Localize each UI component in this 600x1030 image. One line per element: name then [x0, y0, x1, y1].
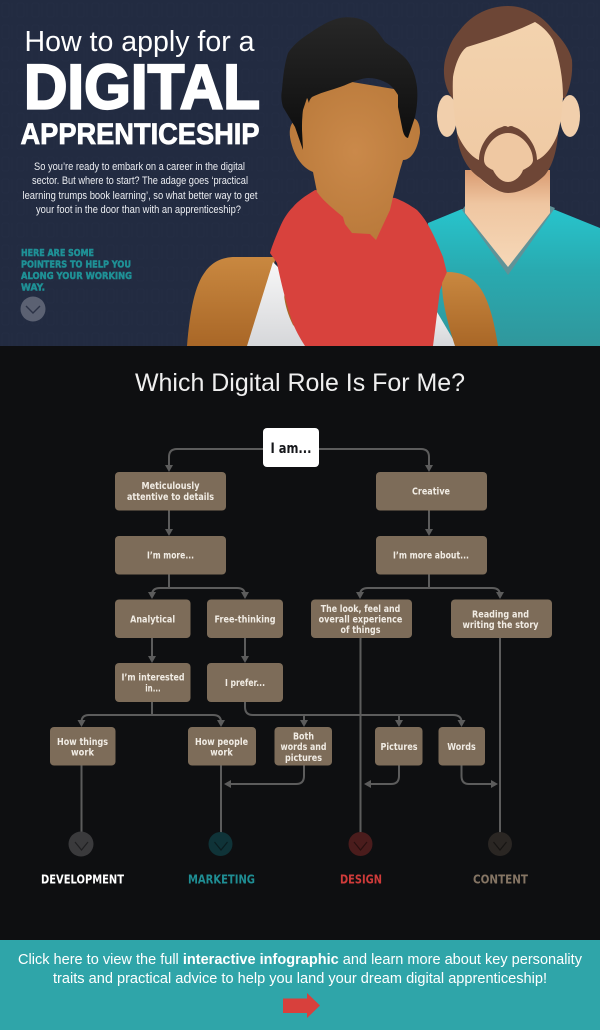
- outcome: design: DESIGN: [340, 872, 382, 886]
- box: how people work: How people: [195, 737, 248, 748]
- box: I'm interested in: [115, 663, 190, 702]
- box: analytical: [115, 600, 190, 638]
- call to action text: Click here to view the full interactive infographic and learn more about key personality: [18, 952, 583, 968]
- connector lines: [82, 449, 500, 838]
- box: reading and writing: [451, 600, 552, 638]
- box: I'm more: [115, 536, 226, 574]
- box: I'm more about: [376, 536, 487, 574]
- box: creative: Creative: [412, 486, 450, 498]
- box: look and feel: overall experience: [319, 614, 403, 626]
- box: I'm more: I’m more...: [147, 550, 194, 562]
- box: analytical: Analytical: [130, 614, 175, 626]
- title: apprenticeship: APPRENTICESHIP: [20, 118, 260, 151]
- box: how people work: [188, 727, 256, 766]
- intro text: learning trumps book learning’, so what better way to get: [22, 190, 258, 202]
- outcome: marketing: MARKETING: [188, 872, 255, 886]
- box: meticulously attentive: attentive to details: [127, 492, 214, 503]
- connector arrowheads: [78, 465, 504, 788]
- box: reading and writing: Reading and: [472, 610, 529, 620]
- box: free-thinking: [207, 600, 283, 638]
- box: both words and pictures: pictures: [285, 753, 322, 764]
- box: meticulously attentive: Meticulously: [142, 481, 200, 492]
- panel: hero header: [0, 0, 600, 346]
- heading: Which Digital Role Is For Me?: [135, 369, 465, 397]
- outcome: development: DEVELOPMENT: [41, 872, 125, 886]
- outcome: design: [340, 832, 382, 886]
- pointers text: [21, 248, 132, 294]
- icon: down chevron button: [20, 296, 46, 322]
- box: meticulously attentive: [115, 472, 226, 510]
- box: I'm interested in: in...: [145, 684, 161, 694]
- beard: [457, 126, 558, 193]
- box: both words and pictures: Both: [293, 732, 314, 742]
- box: creative: [376, 472, 487, 510]
- outcome: development: [41, 832, 125, 886]
- box: reading and writing: writing the story: [462, 620, 539, 631]
- box: pictures: Pictures: [380, 742, 418, 753]
- box: I prefer: I prefer...: [225, 678, 265, 689]
- box: I'm interested in: I’m interested: [122, 672, 184, 684]
- intro text: [22, 161, 258, 216]
- call to action text: traits and practical advice to help you land your dream digital apprenticeship!: [53, 971, 547, 987]
- box: I'm more about: I’m more about...: [393, 550, 469, 562]
- outcome: marketing: [188, 832, 255, 886]
- pointers text: WAY.: [21, 282, 45, 294]
- box: how things work: work: [71, 748, 94, 758]
- box: look and feel: [311, 600, 412, 638]
- illustration: man: [428, 6, 600, 346]
- pointers text: POINTERS TO HELP YOU: [21, 260, 131, 270]
- panel: call to action: [0, 940, 600, 1030]
- box: how people work: work: [210, 748, 233, 758]
- box: I am: I am...: [270, 441, 312, 457]
- box: free-thinking: Free-thinking: [214, 614, 276, 626]
- box: pictures: [375, 727, 422, 766]
- arrow: right: [283, 993, 320, 1018]
- box: how things work: How things: [57, 737, 108, 748]
- pointers text: HERE ARE SOME: [21, 248, 94, 259]
- box: words: Words: [447, 742, 476, 753]
- box: I am: [263, 428, 319, 467]
- box: look and feel: of things: [340, 625, 381, 636]
- panel: flowchart: [0, 346, 600, 940]
- outcome: content: [473, 832, 529, 886]
- intro text: So you’re ready to embark on a career in the digital: [34, 161, 245, 173]
- intro text: sector. But where to start? The adage goes ‘practical: [32, 175, 248, 187]
- title: how to apply: How to apply for a: [24, 26, 255, 58]
- box: I prefer: [207, 663, 283, 702]
- box: both words and pictures: words and: [280, 742, 326, 753]
- box: words: [438, 727, 485, 766]
- call to action text: [18, 952, 583, 987]
- box: how things work: [50, 727, 116, 766]
- outcome: content: CONTENT: [473, 872, 529, 886]
- box: both words and pictures: [274, 727, 332, 766]
- illustration: woman: [187, 17, 498, 346]
- box: look and feel: The look, feel and: [321, 604, 400, 615]
- title: digital: DIGITAL: [24, 52, 260, 122]
- intro text: your foot in the door than with an apprenticeship?: [36, 204, 241, 216]
- pointers text: ALONG YOUR WORKING: [21, 271, 132, 282]
